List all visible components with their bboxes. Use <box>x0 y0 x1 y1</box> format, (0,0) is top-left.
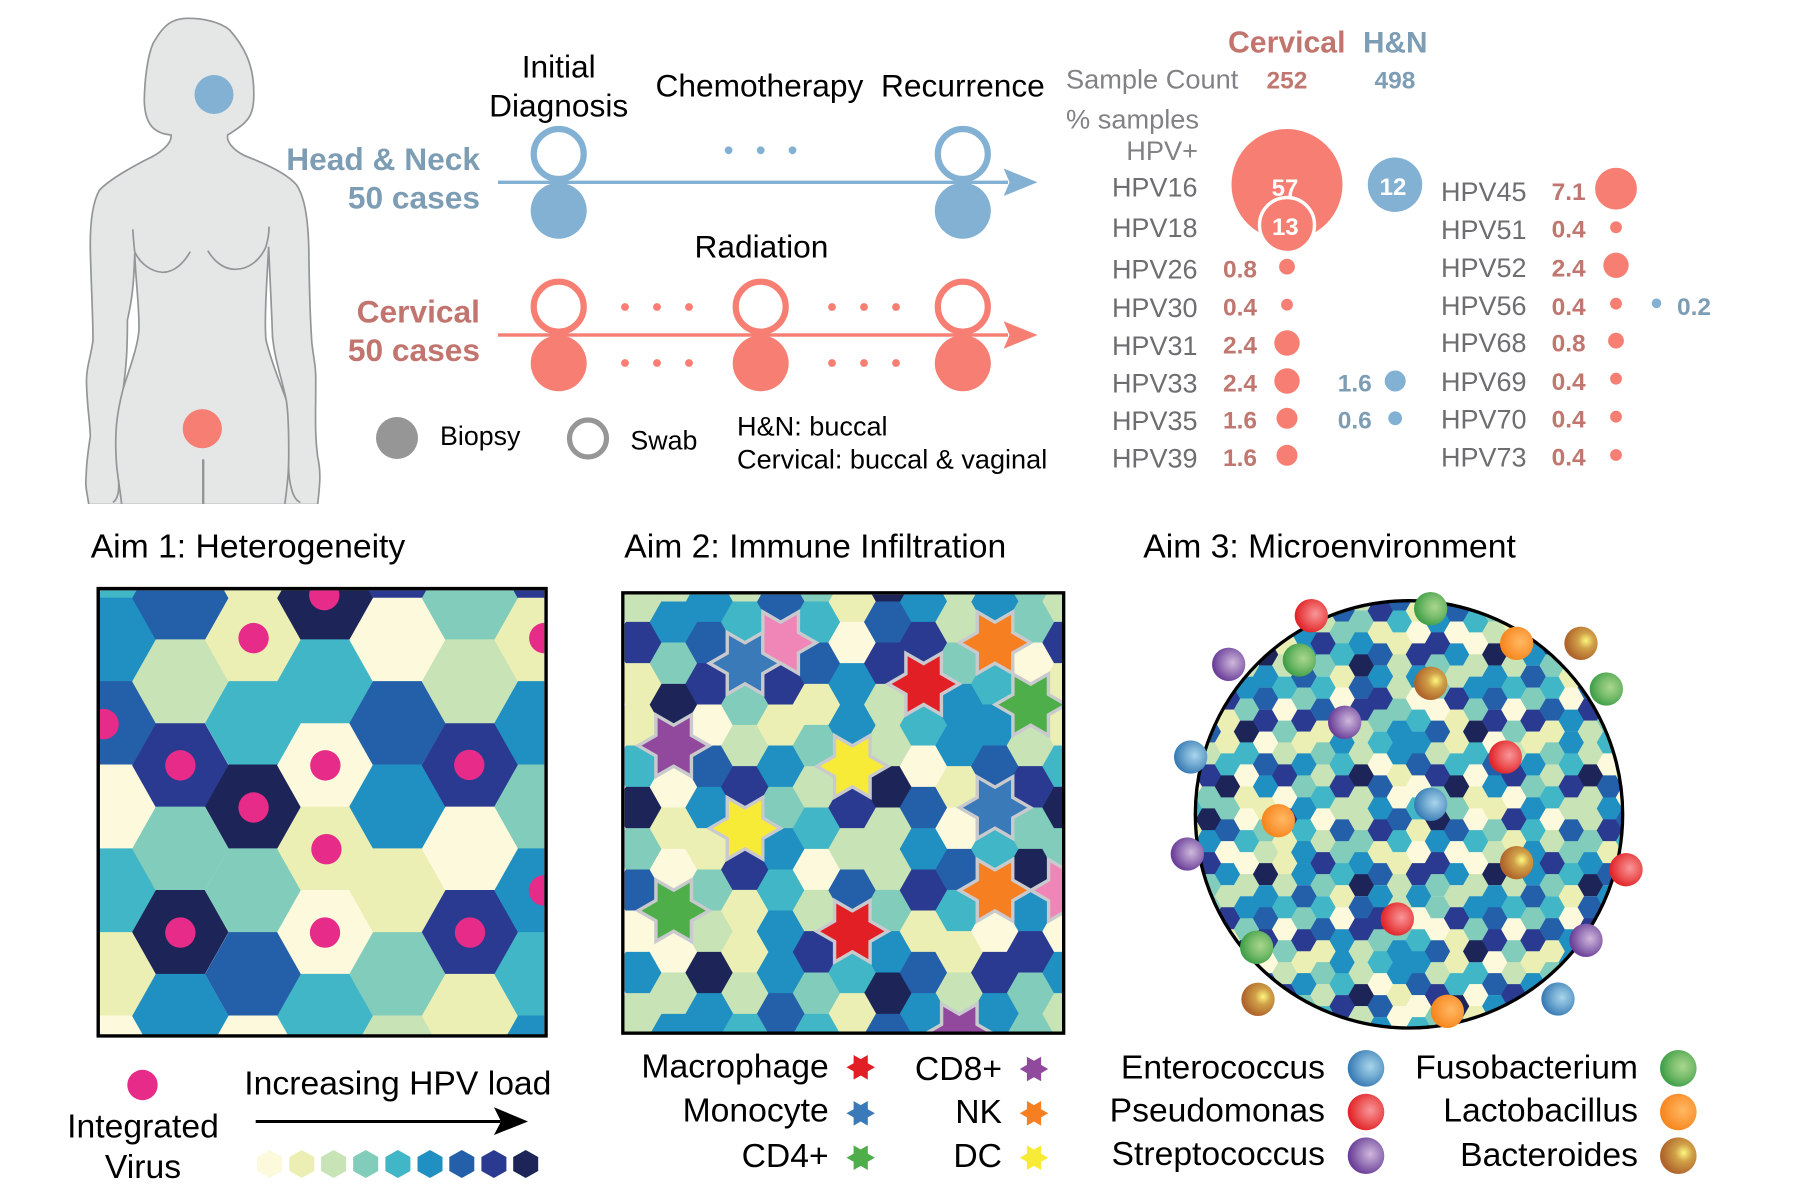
radiation samples <box>733 282 789 391</box>
timeline stage labels: Chemotherapy <box>656 68 863 104</box>
right column cervical values: 0.4 <box>1552 445 1586 472</box>
legend: biopsy and swab: Swab <box>630 425 697 455</box>
recurrence samples <box>935 129 991 239</box>
right column cervical values: 0.4 <box>1552 407 1586 434</box>
hexagon color scale <box>257 1150 538 1178</box>
left column HPV types: HPV35 <box>1112 406 1198 436</box>
legend: integrated virus <box>67 1070 219 1186</box>
sample counts <box>1066 64 1415 95</box>
left column cervical values: 2.4 <box>1223 333 1257 360</box>
HPV16 bubble H&N: 12 <box>1380 174 1406 201</box>
right column HPV types: HPV52 <box>1441 253 1527 283</box>
timeline stage labels: Radiation <box>694 228 828 264</box>
tissue mosaic <box>1170 592 1643 1030</box>
left column HPV types: HPV31 <box>1112 331 1198 361</box>
left column HPV types: HPV18 <box>1112 213 1198 243</box>
sample site note: Cervical: buccal & vaginal <box>737 443 1047 474</box>
right column HPV types: HPV70 <box>1441 405 1527 435</box>
label: Cervical <box>348 294 480 368</box>
left column cervical values: 2.4 <box>1223 371 1257 398</box>
sample site note: H&N: buccal <box>737 410 888 441</box>
heading: Aim 3: Aim 3: Microenvironment <box>1143 527 1516 565</box>
DC <box>953 1137 1048 1175</box>
panel: heterogeneity hexagon map <box>96 586 548 1038</box>
chemotherapy dots <box>725 146 796 154</box>
right column cervical values: 7.1 <box>1552 179 1586 206</box>
label: Head & Neck: 50 cases <box>348 179 480 215</box>
panel: microenvironment circle <box>1170 592 1643 1030</box>
left column cervical bubbles <box>1274 259 1300 466</box>
monocyte: Monocyte <box>683 1092 829 1130</box>
right column cervical values: 0.4 <box>1552 216 1586 243</box>
percent samples heading <box>1066 104 1199 166</box>
right column HPV types: HPV68 <box>1441 328 1527 358</box>
left column H&N bubbles <box>1385 370 1406 425</box>
right column cervical values: 0.4 <box>1552 294 1586 321</box>
left column H&N values <box>1338 371 1372 434</box>
right column cervical values: 2.4 <box>1552 256 1586 283</box>
timeline stage labels: Initial <box>522 49 596 85</box>
timeline stage labels: Diagnosis <box>489 88 628 124</box>
interval dots <box>621 303 900 367</box>
left column HPV types: HPV39 <box>1112 443 1198 473</box>
sample counts: Sample Count <box>1066 64 1239 95</box>
label: Cervical: Cervical <box>357 294 480 330</box>
right column HPV types: HPV56 <box>1441 291 1527 321</box>
HPV56 H&N value: 0.2 <box>1677 294 1711 321</box>
left column HPV types: HPV30 <box>1112 293 1198 323</box>
DC: DC <box>953 1137 1002 1175</box>
left column H&N values: 0.6 <box>1338 407 1372 434</box>
sample counts: 252 <box>1267 68 1307 95</box>
left column cervical values: 0.8 <box>1223 257 1257 284</box>
bacteria spheres <box>1171 592 1643 1028</box>
CD4+: CD4+ <box>742 1137 829 1175</box>
cervical timeline <box>348 282 1038 391</box>
right column cervical values: 0.4 <box>1552 369 1586 396</box>
left column cervical values <box>1223 257 1257 472</box>
line and arrow <box>498 321 1038 349</box>
HPV18 bubble cervical: 13 <box>1272 214 1299 241</box>
left column cervical values: 1.6 <box>1223 445 1257 472</box>
left column cervical values: 0.4 <box>1223 295 1257 322</box>
CD8+: CD8+ <box>915 1050 1002 1088</box>
heading: Aim 1: Aim 1: Heterogeneity <box>91 527 405 565</box>
HPV16 bubble H&N <box>1368 158 1422 212</box>
left column HPV types: HPV33 <box>1112 369 1198 399</box>
HPV56 H&N value <box>1652 294 1711 321</box>
right column HPV types: HPV45 <box>1441 177 1527 207</box>
legend: biopsy and swab <box>376 417 697 459</box>
label: Cervical: 50 cases <box>348 332 480 368</box>
immune cell stars <box>638 612 1102 1065</box>
right column HPV types: HPV69 <box>1441 367 1527 397</box>
timeline stage labels <box>489 49 1045 264</box>
column headers: H&N <box>1363 26 1428 59</box>
left column H&N values: 1.6 <box>1338 371 1372 398</box>
arrow <box>256 1107 528 1135</box>
left column HPV types: HPV26 <box>1112 255 1198 285</box>
Pseudomonas: Pseudomonas <box>1110 1092 1325 1130</box>
Fusobacterium: Fusobacterium <box>1415 1049 1638 1087</box>
NK: NK <box>955 1093 1003 1131</box>
Lactobacillus: Lactobacillus <box>1443 1092 1638 1130</box>
timeline stage labels: Recurrence <box>881 68 1045 104</box>
legend: immune cell types <box>641 1048 1048 1175</box>
initial diagnosis samples <box>531 282 587 391</box>
sample site note <box>737 410 1047 474</box>
percent samples heading: % samples <box>1066 104 1199 134</box>
Bacteroides: Bacteroides <box>1460 1136 1638 1174</box>
right column HPV types <box>1441 177 1527 473</box>
head and neck tumor site <box>194 75 234 114</box>
HPV16 bubble cervical: 57 <box>1272 175 1298 202</box>
legend: integrated virus: Integrated <box>67 1108 219 1146</box>
right column HPV types: HPV73 <box>1441 443 1527 473</box>
Streptococcus: Streptococcus <box>1112 1135 1325 1173</box>
line and arrow <box>498 168 1038 196</box>
left column cervical values: 1.6 <box>1223 407 1257 434</box>
initial diagnosis samples <box>531 129 587 239</box>
panel: immune infiltration map <box>621 591 1066 1035</box>
HPV18 bubble cervical <box>1260 198 1314 252</box>
sample counts: 498 <box>1375 68 1415 95</box>
legend: increasing HPV load <box>244 1065 551 1178</box>
label: Head & Neck: Head & Neck <box>286 141 480 177</box>
legend: increasing HPV load: Increasing HPV load <box>244 1065 551 1103</box>
column headers <box>1228 26 1428 59</box>
column headers: Cervical <box>1228 26 1345 59</box>
left column HPV types <box>1112 172 1198 473</box>
recurrence samples <box>935 282 991 391</box>
label: Head & Neck <box>286 141 480 215</box>
NK <box>955 1093 1048 1131</box>
right column cervical bubbles <box>1595 168 1637 461</box>
cervical tumor site <box>183 409 222 448</box>
head and neck timeline <box>286 129 1038 239</box>
left column HPV types: HPV16 <box>1112 172 1198 202</box>
right column cervical values: 0.8 <box>1552 331 1586 358</box>
legend: integrated virus: Virus <box>105 1148 181 1186</box>
legend: biopsy and swab: Biopsy <box>440 421 521 451</box>
CD8+ <box>915 1050 1048 1088</box>
body silhouette illustration <box>86 18 320 505</box>
HPV prevalence table <box>1066 26 1711 473</box>
HPV16 bubble cervical <box>1232 129 1342 240</box>
CD4+ <box>742 1137 875 1175</box>
heading: Aim 2: Aim 2: Immune Infiltration <box>624 527 1006 565</box>
percent samples heading: HPV+ <box>1126 135 1198 166</box>
right column HPV types: HPV51 <box>1441 215 1527 245</box>
macrophage: Macrophage <box>641 1048 829 1086</box>
legend: bacteria <box>1110 1049 1697 1174</box>
right column cervical values <box>1552 179 1586 472</box>
Enterococcus: Enterococcus <box>1121 1049 1325 1087</box>
